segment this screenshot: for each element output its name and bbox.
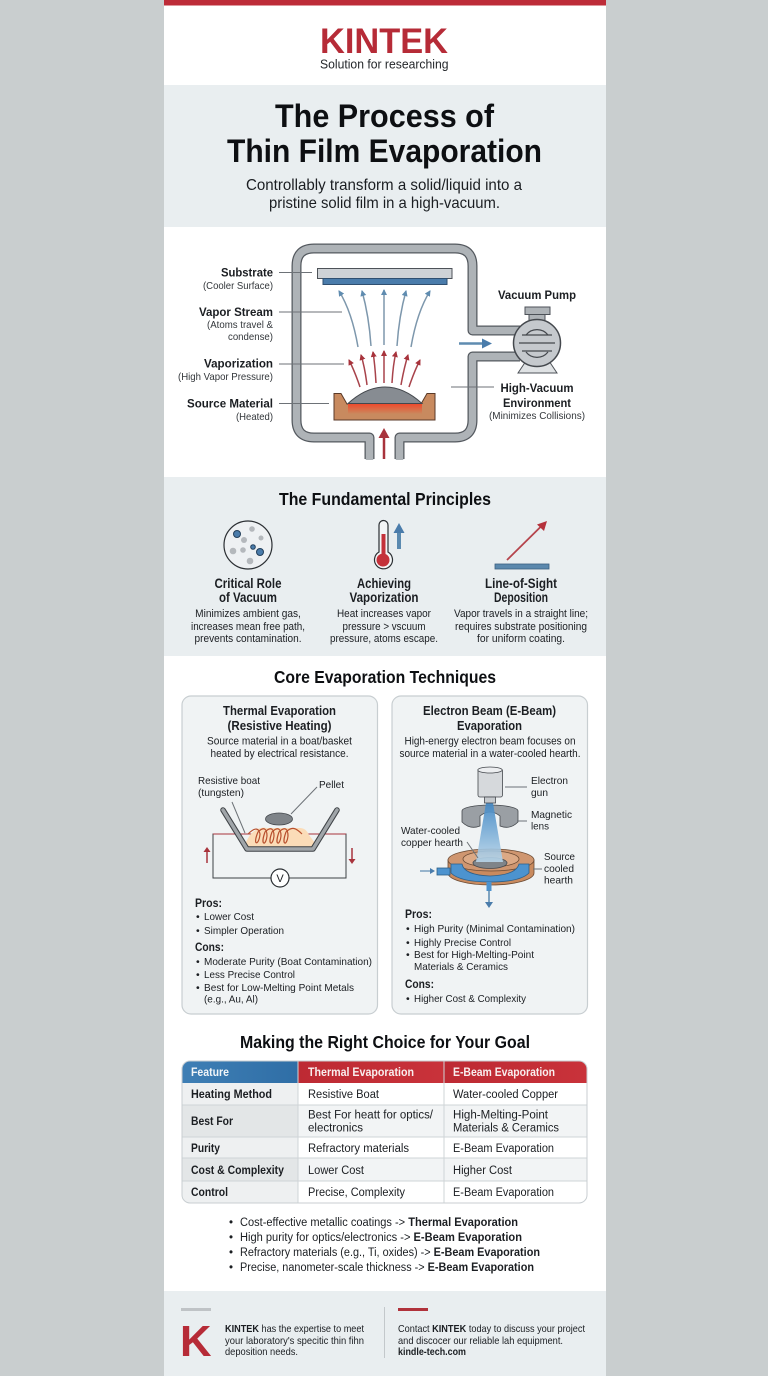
row: best for: Best For — [191, 1116, 233, 1128]
diagram: resistive boat circuit: Resistive boat — [198, 775, 260, 787]
principle: critical role of vacuum: of Vacuum — [219, 590, 277, 605]
card description — [400, 736, 580, 760]
cons list — [405, 977, 527, 1005]
row: control: E-Beam Evaporation — [453, 1187, 554, 1199]
card title: (Resistive Heating) — [228, 719, 332, 733]
vaporization arrows — [349, 351, 420, 387]
diagram: electron beam hearth: gun — [531, 787, 548, 799]
panel: electron beam evaporation — [392, 696, 588, 1014]
label: vaporization: (High Vapor Pressure) — [178, 371, 273, 383]
title: The Process of — [275, 98, 494, 134]
principle: line-of-sight deposition: Deposition — [494, 590, 548, 605]
row: best for — [191, 1110, 559, 1134]
card description: Source material in a boat/basket — [207, 736, 352, 748]
row: control — [191, 1187, 554, 1199]
panel: thermal evaporation — [182, 696, 378, 1014]
cons list: (e.g., Au, Al) — [204, 994, 258, 1006]
label: high-vacuum environment: (Minimizes Collisions) — [489, 410, 585, 422]
table shading — [182, 1083, 587, 1203]
footer: contact block: kindle-tech.com — [398, 1346, 466, 1358]
heading: fundamental principles: The Fundamental Principles — [279, 489, 491, 509]
top accent bar — [164, 0, 606, 6]
diagram: resistive boat circuit — [198, 775, 356, 887]
row: purity — [191, 1143, 554, 1155]
row: heating method: Heating Method — [191, 1089, 272, 1101]
label: vapor stream — [199, 305, 342, 343]
subtitle: pristine solid film in a high-vacuum. — [269, 195, 500, 212]
cons list: • — [196, 982, 200, 994]
row: purity: Purity — [191, 1143, 221, 1155]
diagram: electron beam hearth: cooled — [544, 863, 574, 875]
title: Thin Film Evaporation — [227, 133, 542, 169]
label: source material — [187, 396, 329, 423]
principle: achieving vaporization: pressure > vscuum — [342, 621, 426, 633]
row: control: Precise, Complexity — [308, 1187, 405, 1199]
row: best for: High-Melting-Point — [453, 1110, 549, 1122]
card title — [423, 704, 556, 733]
logo: KINTEK: KINTEK — [320, 22, 448, 61]
row: cost and complexity: Cost & Complexity — [191, 1165, 285, 1177]
panel: title band — [164, 85, 606, 227]
recommendations list: Cost-effective metallic coatings -> Thermal Evaporation — [240, 1217, 518, 1229]
footer: contact block: and discocer our reliable lah equipment. — [398, 1335, 563, 1347]
label: substrate — [203, 266, 312, 292]
card description: High-energy electron beam focuses on — [404, 736, 576, 748]
label: vapor stream: (Atoms travel & — [207, 319, 273, 331]
recommendations list: • — [229, 1217, 233, 1229]
label: high-vacuum environment: High-Vacuum — [500, 381, 574, 395]
cons list — [195, 940, 372, 1006]
cons list: • — [196, 969, 200, 981]
label: vapor stream: Vapor Stream — [199, 305, 273, 319]
label: source material: (Heated) — [236, 411, 273, 423]
footer: contact block: Contact KINTEK today to discuss your project — [398, 1323, 585, 1335]
footer: expertise block: K — [180, 1317, 212, 1366]
diagram: electron beam hearth: lens — [531, 820, 549, 832]
cons list: Cons: — [195, 940, 224, 954]
footer: contact block — [398, 1308, 585, 1358]
table border — [182, 1061, 587, 1203]
row: purity: Refractory materials — [308, 1143, 409, 1155]
pros list: • — [196, 911, 200, 923]
pros list: • — [406, 949, 410, 961]
row: cost and complexity: Lower Cost — [308, 1165, 365, 1177]
label: vacuum pump: Vacuum Pump — [498, 288, 576, 302]
row: best for: Best For heatt for optics/ — [308, 1110, 434, 1122]
principle: line-of-sight deposition: Line-of-Sight — [485, 576, 557, 591]
pros list: Pros: — [405, 907, 432, 921]
footer: expertise block: deposition needs. — [225, 1346, 298, 1358]
cons list: • — [196, 956, 200, 968]
principle: line-of-sight deposition: Vapor travels in a straight line; — [454, 608, 588, 620]
label: vaporization: Vaporization — [204, 356, 273, 370]
pros list: Highly Precise Control — [414, 937, 511, 949]
pros list: High Purity (Minimal Contamination) — [414, 923, 575, 935]
diagram: resistive boat circuit: Pellet — [319, 779, 344, 791]
vapor stream arrows — [339, 290, 430, 347]
logo: KINTEK: Solution for researching — [320, 58, 449, 72]
principle: achieving vaporization — [330, 576, 438, 645]
row: heating method — [191, 1089, 558, 1101]
diagram: electron beam hearth: Source — [544, 851, 575, 863]
icon: thermometer with rising arrow — [374, 520, 404, 569]
label: source material: Source Material — [187, 396, 273, 410]
pros list — [195, 896, 284, 937]
subtitle — [246, 177, 522, 212]
title — [227, 98, 542, 169]
row: cost and complexity — [191, 1165, 513, 1177]
heading: core evaporation techniques: Core Evaporation Techniques — [274, 667, 496, 687]
label: high-vacuum environment — [451, 381, 585, 422]
table header: Feature — [191, 1067, 229, 1079]
diagram: electron beam hearth: hearth — [544, 874, 573, 886]
row: best for: electronics — [308, 1122, 363, 1134]
principle: line-of-sight deposition: for uniform coating. — [477, 633, 565, 645]
pros list: Simpler Operation — [204, 925, 284, 937]
principle: critical role of vacuum: prevents contamination. — [194, 633, 302, 645]
cons list: Best for Low-Melting Point Metals — [204, 982, 354, 994]
footer: expertise block — [180, 1308, 364, 1366]
pros list — [405, 907, 575, 973]
diagram: electron beam hearth — [401, 767, 575, 908]
page column — [164, 0, 606, 1376]
card title: Evaporation — [457, 719, 522, 733]
vacuum chamber walls — [296, 248, 522, 460]
card description — [207, 736, 352, 760]
principle: achieving vaporization: pressure, atoms escape. — [330, 633, 438, 645]
heading: making the right choice: Making the Right Choice for Your Goal — [240, 1032, 530, 1052]
icon: line-of-sight arrow — [495, 521, 549, 569]
table grid — [182, 1061, 587, 1203]
table header: E-Beam Evaporation — [453, 1067, 555, 1079]
recommendations list: • — [229, 1262, 233, 1274]
label: high-vacuum environment: Environment — [503, 396, 571, 410]
principle: critical role of vacuum: increases mean free path, — [191, 621, 305, 633]
recommendations list: • — [229, 1232, 233, 1244]
card title — [223, 704, 336, 733]
diagram: electron beam hearth: Water-cooled — [401, 825, 460, 837]
label: vaporization — [178, 356, 344, 383]
label: vapor stream: condense) — [228, 331, 273, 343]
diagram: resistive boat circuit: V — [276, 873, 284, 885]
pros list: • — [406, 923, 410, 935]
diagram: resistive boat circuit: (tungsten) — [198, 787, 244, 799]
pros list: Best for High-Melting-Point — [414, 949, 534, 961]
recommendations list: Refractory materials (e.g., Ti, oxides) -> E-Beam Evaporation — [240, 1247, 540, 1259]
principle: critical role of vacuum: Minimizes ambient gas, — [195, 608, 301, 620]
row: heating method: Water-cooled Copper — [453, 1089, 558, 1101]
row: best for: Materials & Ceramics — [453, 1122, 559, 1134]
principle: critical role of vacuum: Critical Role — [214, 576, 282, 591]
pump flow arrow — [459, 338, 492, 348]
substrate — [318, 268, 452, 284]
row: purity: E-Beam Evaporation — [453, 1143, 554, 1155]
cons list: Less Precise Control — [204, 969, 295, 981]
label: substrate: Substrate — [221, 266, 273, 280]
icon: vacuum pump — [514, 307, 560, 373]
label: substrate: (Cooler Surface) — [203, 280, 273, 292]
footer: expertise block: your laboratory's specitic thin fihn — [225, 1335, 364, 1347]
recommendations list — [229, 1217, 540, 1274]
card description: source material in a water-cooled hearth. — [400, 748, 580, 760]
principle: line-of-sight deposition: requires substrate positioning — [455, 621, 587, 633]
source material crucible — [334, 387, 435, 420]
pros list: Materials & Ceramics — [414, 961, 508, 973]
principle: achieving vaporization: Achieving — [357, 576, 411, 591]
table header — [182, 1061, 587, 1083]
panel: footer — [164, 1291, 606, 1376]
principle: achieving vaporization: Vaporization — [350, 590, 418, 605]
cons list: Higher Cost & Complexity — [414, 993, 527, 1005]
panel: fundamental principles — [164, 477, 606, 656]
principle: achieving vaporization: Heat increases vapor — [337, 608, 431, 620]
table header: Thermal Evaporation — [308, 1067, 414, 1079]
cons list: • — [406, 993, 410, 1005]
pros list: Pros: — [195, 896, 222, 910]
recommendations list: Precise, nanometer-scale thickness -> E-Beam Evaporation — [240, 1262, 534, 1274]
cons list: Moderate Purity (Boat Contamination) — [204, 956, 372, 968]
recommendations list: • — [229, 1247, 233, 1259]
card description: heated by electrical resistance. — [210, 748, 348, 760]
card title: Electron Beam (E-Beam) — [423, 704, 556, 718]
row: control: Control — [191, 1187, 228, 1199]
pros list: • — [196, 925, 200, 937]
panel: evaporation chamber diagram — [178, 248, 585, 460]
footer: expertise block: KINTEK has the expertise to meet — [225, 1323, 364, 1335]
recommendations list: High purity for optics/electronics -> E-Beam Evaporation — [240, 1232, 522, 1244]
icon: vacuum particles — [224, 521, 272, 569]
diagram: electron beam hearth: copper hearth — [401, 837, 463, 849]
pros list: • — [406, 937, 410, 949]
row: heating method: Resistive Boat — [308, 1089, 380, 1101]
diagram: electron beam hearth: Magnetic — [531, 809, 572, 821]
principle: critical role of vacuum — [191, 576, 305, 645]
cons list: Cons: — [405, 977, 434, 991]
principle: line-of-sight deposition — [454, 576, 588, 645]
footer divider — [384, 1307, 385, 1358]
diagram: electron beam hearth: Electron — [531, 775, 568, 787]
comparison table — [182, 1061, 587, 1203]
pros list: Lower Cost — [204, 911, 254, 923]
row: cost and complexity: Higher Cost — [453, 1165, 513, 1177]
card title: Thermal Evaporation — [223, 704, 336, 718]
subtitle: Controllably transform a solid/liquid into a — [246, 177, 522, 194]
heat arrow — [378, 428, 390, 459]
